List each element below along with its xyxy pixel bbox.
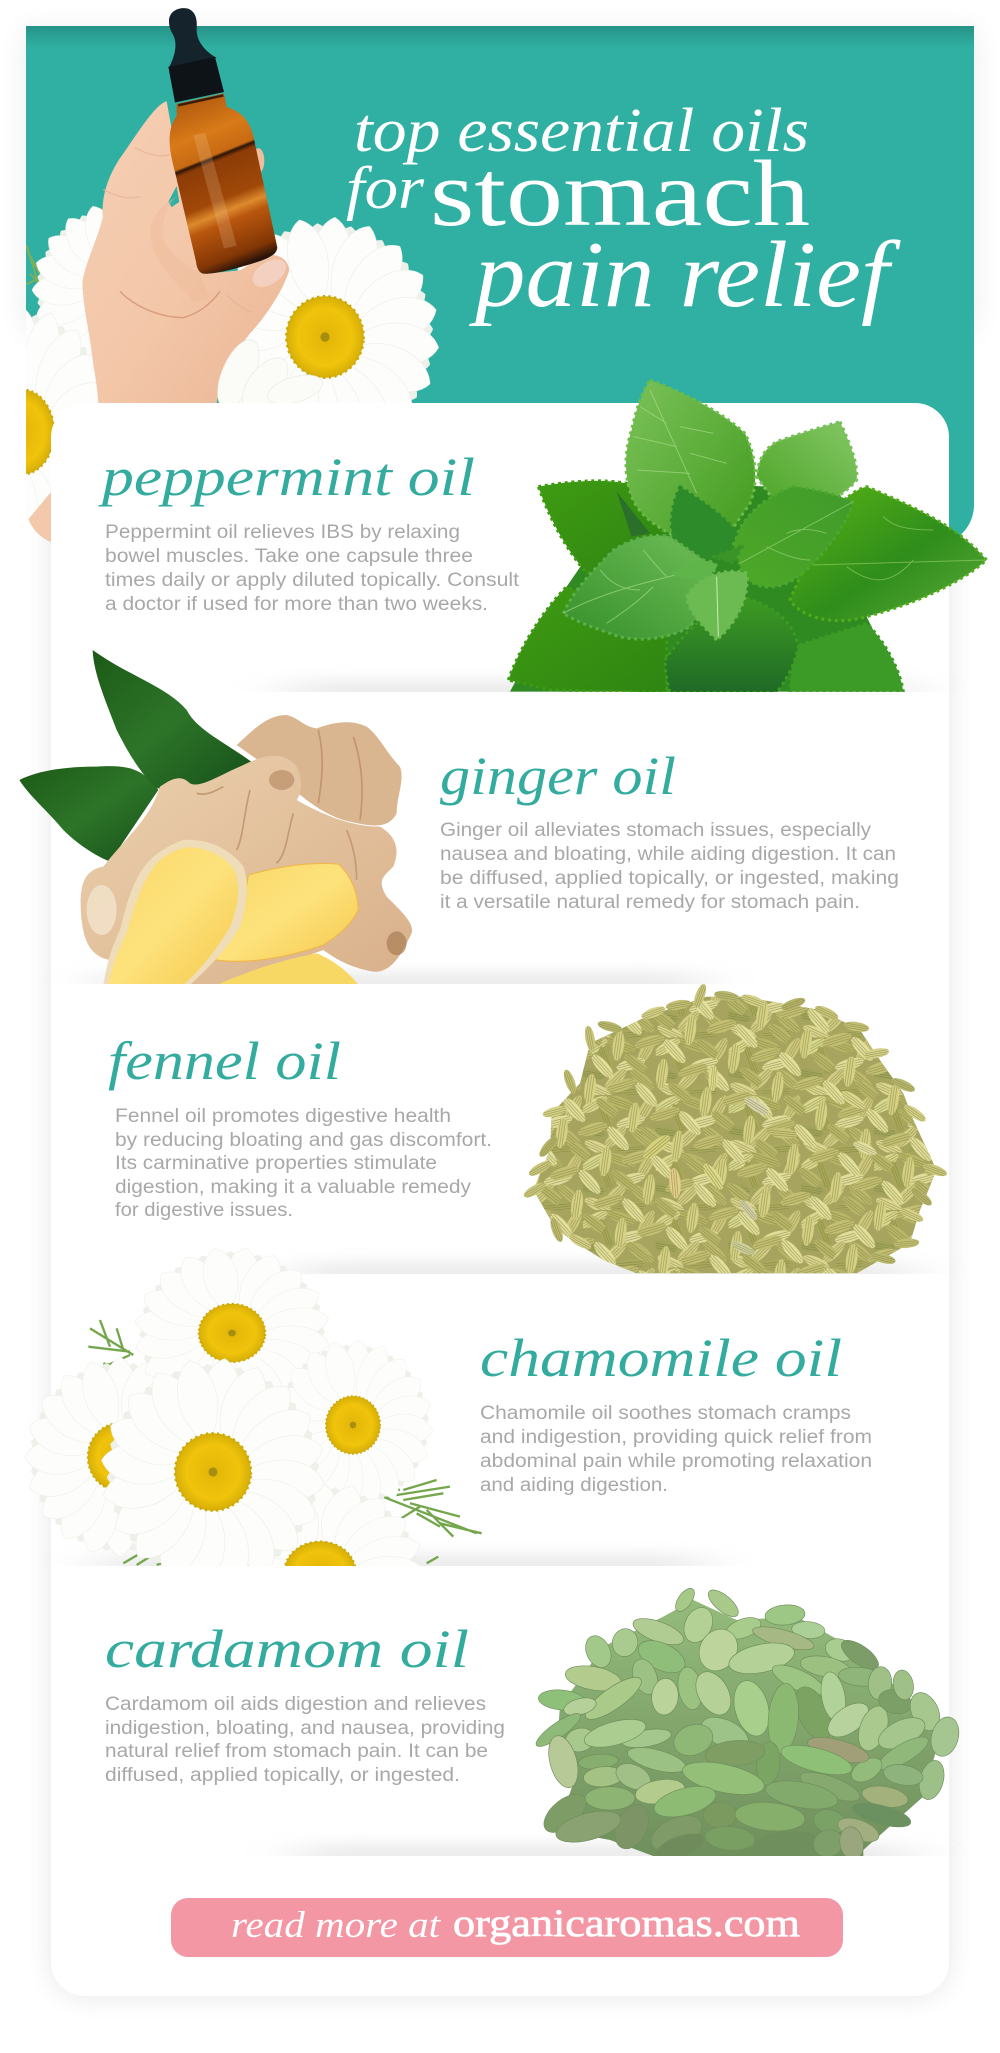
back root [237, 715, 402, 825]
text: chamomile description [480, 1403, 872, 1496]
leaves [19, 650, 253, 862]
text: ginger description: be diffused, applied topically, or ingested, making [440, 868, 899, 889]
hand [82, 101, 291, 403]
text: cardamom description [105, 1694, 505, 1786]
text: chamomile description: abdominal pain while promoting relaxation [480, 1451, 872, 1472]
text: cardamom description: diffused, applied topically, or ingested. [105, 1765, 460, 1786]
leaf right big [790, 487, 987, 621]
slice bottom [217, 953, 358, 985]
text: chamomile description: Chamomile oil soothes stomach cramps [480, 1403, 851, 1424]
button: read more: organicaromas.com [453, 1902, 800, 1945]
slice front [103, 840, 247, 985]
text: peppermint description: Peppermint oil relieves IBS by relaxing [105, 522, 460, 543]
icon: fennel seeds [510, 980, 960, 1280]
leaf bottom left [508, 587, 667, 693]
sprigs [26, 246, 40, 286]
icon: ginger root [19, 650, 412, 987]
text: ginger description [440, 820, 899, 913]
title [346, 97, 901, 327]
text: ginger description: Ginger oil alleviates stomach issues, especially [440, 820, 872, 841]
button: read more [171, 1898, 843, 1957]
icon: chamomile flowers [25, 1248, 482, 1566]
title: for [346, 155, 425, 221]
leaf base mass [510, 480, 903, 692]
leaf top big [626, 380, 755, 557]
panel: white card [51, 403, 949, 1996]
section: peppermint oil [97, 380, 987, 693]
section: cardamom oil [105, 1585, 963, 1865]
panel: teal header [26, 26, 974, 545]
text: fennel description: Its carminative properties stimulate [115, 1153, 437, 1174]
cap [168, 57, 224, 102]
heading: chamomile oil: chamomile oil [480, 1328, 842, 1388]
icon: cardamom pods [532, 1585, 963, 1865]
text: peppermint description: a doctor if used for more than two weeks. [105, 594, 488, 615]
daisies behind the hand [0, 194, 460, 568]
heading: fennel oil: fennel oil [108, 1031, 341, 1091]
text: fennel description: for digestive issues. [115, 1200, 293, 1221]
edge seeds [522, 983, 948, 1266]
text: fennel description: digestion, making it a valuable remedy [115, 1177, 472, 1198]
dropper bulb [169, 8, 217, 67]
icon: mint leaves [508, 380, 987, 693]
leaf center small light [687, 571, 747, 640]
heading: cardamom oil: cardamom oil [105, 1619, 469, 1679]
leaf center small dark [671, 487, 737, 560]
text: ginger description: it a versatile natural remedy for stomach pain. [440, 892, 860, 913]
section shadows [100, 680, 910, 1866]
text: cardamom description: indigestion, bloating, and nausea, providing [105, 1718, 505, 1739]
leaf upper right [756, 420, 858, 497]
text: ginger description: nausea and bloating, while aiding digestion. It can [440, 844, 896, 865]
leaf bottom right [790, 623, 903, 692]
heading: ginger oil: ginger oil [440, 746, 676, 806]
text: fennel description: Fennel oil promotes digestive health [115, 1106, 451, 1127]
section: ginger oil [19, 650, 899, 987]
skin patch at corner [28, 492, 51, 542]
leaf center right [733, 487, 853, 587]
front petals [217, 339, 323, 403]
section: chamomile oil [25, 1248, 871, 1566]
leaf left front [563, 535, 713, 639]
text: chamomile description: and aiding digestion. [480, 1475, 668, 1496]
text: chamomile description: and indigestion, providing quick relief from [480, 1427, 872, 1448]
title: top essential oils [354, 97, 809, 165]
text: peppermint description [105, 522, 520, 615]
text: cardamom description: Cardamom oil aids digestion and relieves [105, 1694, 486, 1715]
text: fennel description [115, 1106, 492, 1221]
button: read more: read more at [231, 1905, 442, 1946]
heading: peppermint oil: peppermint oil [97, 447, 475, 507]
sprigs [88, 1320, 482, 1565]
title: stomach [430, 142, 810, 246]
leaf left dark [538, 481, 667, 573]
bottle body [170, 93, 277, 274]
front root [81, 756, 412, 987]
title: pain relief [469, 223, 901, 327]
slice right [215, 863, 358, 961]
leaf bottom center [665, 597, 798, 693]
text: peppermint description: times daily or apply diluted topically. Consult [105, 570, 520, 591]
text: peppermint description: bowel muscles. Take one capsule three [105, 546, 473, 567]
icon: hand holding bottle [82, 8, 325, 419]
text: cardamom description: natural relief from stomach pain. It can be [105, 1741, 488, 1762]
section: fennel oil [108, 980, 960, 1280]
text: fennel description: by reducing bloating and gas discomfort. [115, 1130, 492, 1151]
